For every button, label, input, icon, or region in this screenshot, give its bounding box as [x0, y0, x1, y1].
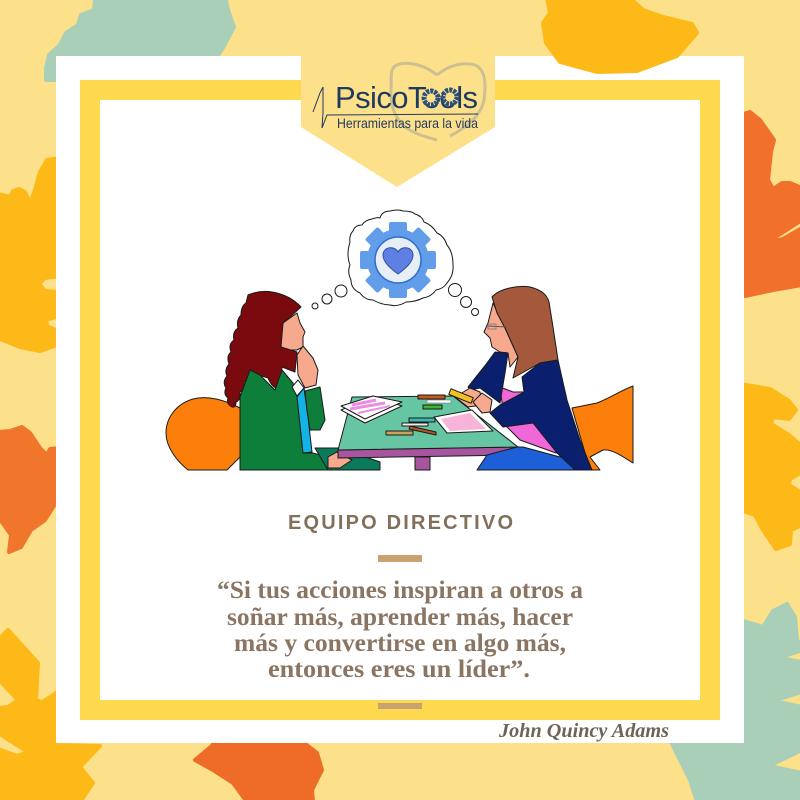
quote: más y convertirse en algo más,	[234, 630, 566, 657]
logo pulse line	[313, 87, 478, 128]
top right yellow leaf over frame	[543, 0, 697, 72]
logo gears	[424, 90, 457, 105]
right woman	[449, 286, 592, 470]
quote: “Si tus acciones inspiran a otros a	[217, 577, 583, 604]
divider	[378, 555, 422, 562]
quote: soñar más, aprender más, hacer	[227, 604, 573, 631]
heading: EQUIPO DIRECTIVO	[288, 512, 513, 534]
right chair	[572, 386, 633, 470]
logo pennant	[301, 56, 495, 187]
white frame	[56, 56, 744, 743]
attribution: John Quincy Adams	[498, 720, 669, 742]
lower divider	[378, 703, 422, 709]
yellow border band	[90, 90, 710, 710]
logo tagline: Herramientas para la vida	[337, 115, 478, 131]
quote: entonces eres un líder”.	[268, 656, 530, 683]
illustration: two women at a table	[166, 210, 633, 470]
logo wordmark: PsicoTools	[335, 80, 478, 115]
papers on table	[341, 396, 493, 433]
table	[338, 395, 518, 470]
quote	[217, 577, 583, 683]
left chair	[166, 398, 243, 470]
pencils	[386, 395, 451, 435]
logo heart outline	[391, 63, 485, 140]
thought cloud	[312, 210, 478, 316]
icon: gear with heart	[360, 222, 436, 298]
left woman	[224, 291, 380, 470]
